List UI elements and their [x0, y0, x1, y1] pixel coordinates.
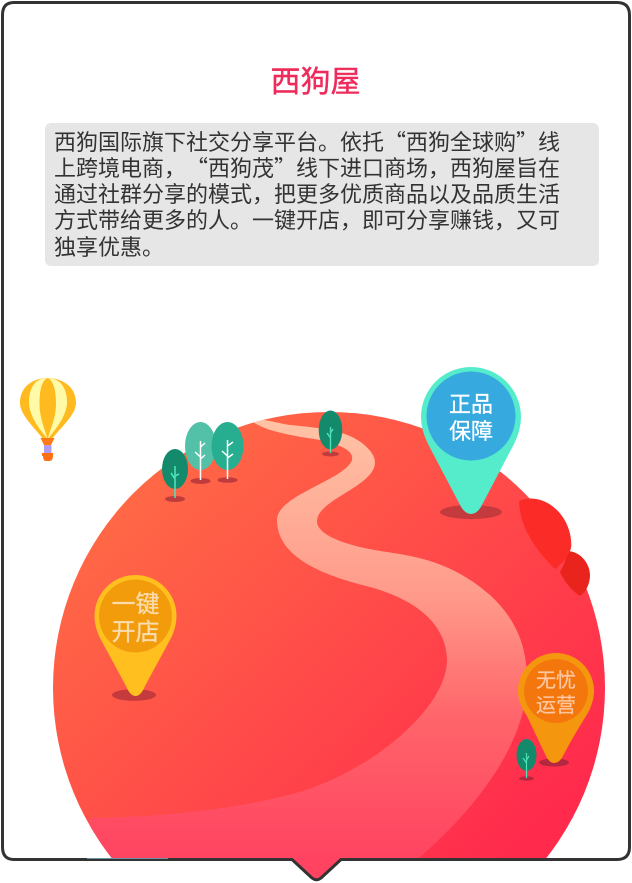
pin: 正品保障: 正品 [449, 387, 493, 419]
bushes on right edge [519, 499, 590, 596]
pin: 无忧运营: 无忧 [536, 664, 576, 693]
winding road [89, 419, 527, 883]
pin: 无忧运营 [518, 653, 594, 766]
hot air balloon [20, 378, 76, 461]
tree: top of road [319, 410, 342, 456]
pin: 一键开店: 一键 [112, 584, 160, 619]
description text: 方式带给更多的人。一键开店，即可分享赚钱，又可 [54, 203, 560, 235]
tree: dark left [162, 449, 188, 502]
pin: 无忧运营: 运营 [536, 689, 576, 718]
description text: 独享优惠。 [54, 230, 164, 262]
description text [54, 125, 560, 262]
pin: 一键开店: 开店 [112, 612, 160, 647]
globe [53, 412, 605, 883]
large bush [519, 499, 571, 569]
description text: 上跨境电商，“西狗茂”线下进口商场，西狗屋旨在 [54, 151, 560, 183]
pin: 正品保障 [421, 367, 521, 519]
title: 西狗屋 [270, 57, 360, 101]
description text: 通过社群分享的模式，把更多优质商品以及品质生活 [54, 177, 560, 209]
tree: medium [212, 422, 244, 483]
pin: 一键开店 [94, 575, 177, 701]
small bush [560, 551, 590, 596]
pin: 正品保障: 保障 [449, 414, 493, 446]
description panel [45, 123, 599, 266]
description text: 西狗国际旗下社交分享平台。依托“西狗全球购”线 [54, 125, 560, 157]
tree: lower right [516, 739, 536, 781]
tree: light [185, 422, 216, 484]
illustration: globe scene [53, 412, 605, 883]
